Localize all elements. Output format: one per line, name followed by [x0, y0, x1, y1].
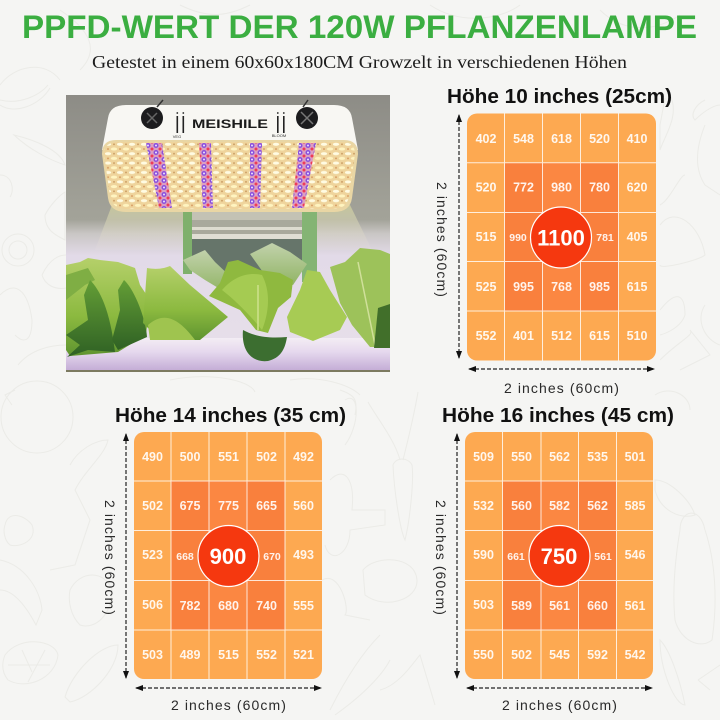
center value 900: [198, 526, 259, 586]
VEG mark: [173, 112, 184, 139]
PPFD grid: 16 inches: [465, 432, 653, 679]
PPFD grid: 10 inches: 525: [476, 280, 496, 294]
LED strips: [146, 143, 172, 208]
heading: 10 inches: Höhe 10 inches (25cm): [447, 86, 672, 108]
PPFD grid: 10 inches: 615: [589, 329, 610, 343]
PPFD grid: 16 inches: 502: [511, 648, 532, 662]
PPFD grid: 14 inches: 668: [176, 551, 194, 563]
VEG mark: VEG: [173, 134, 181, 139]
PPFD grid: 10 inches: 520: [476, 180, 496, 194]
PPFD grid: 14 inches: 515: [218, 648, 239, 662]
PPFD grid: 10 inches: 995: [513, 280, 534, 294]
PPFD grid: 14 inches: 506: [142, 598, 163, 612]
PPFD grid: 10 inches: 615: [627, 280, 647, 294]
PPFD grid: 10 inches: 515: [476, 230, 496, 244]
photo: grow lamp above lettuce: [66, 95, 390, 372]
PPFD grid: 16 inches: 561: [625, 599, 645, 613]
PPFD grid: 16 inches: 661: [507, 551, 525, 563]
PPFD grid: 10 inches: 548: [513, 132, 534, 146]
PPFD grid: 14 inches: 551: [218, 450, 239, 464]
PPFD grid: 10 inches: 980: [551, 180, 572, 194]
PPFD grid: 16 inches: 590: [473, 548, 494, 562]
PPFD grid: 16 inches: 501: [625, 450, 645, 464]
PPFD grid: 14 inches: 740: [256, 599, 277, 613]
PPFD grid: 10 inches: 510: [627, 329, 647, 343]
PPFD grid: 14 inches: 775: [218, 499, 239, 513]
knob right: [296, 100, 318, 129]
PPFD grid: 14 inches: 489: [180, 648, 200, 662]
PPFD grid: 14 inches: 500: [180, 450, 200, 464]
PPFD grid: 10 inches: 520: [589, 132, 610, 146]
PPFD grid: 14 inches: 782: [180, 599, 200, 613]
height axis: 14 inches: 2 inches (60cm): [102, 500, 118, 616]
PPFD grid: 16 inches: 532: [473, 499, 494, 513]
PPFD grid: 10 inches: 781: [596, 232, 614, 244]
center value 750: 750: [541, 544, 577, 569]
PPFD grid: 14 inches: 502: [256, 450, 277, 464]
PPFD grid: 14 inches: 490: [142, 450, 163, 464]
PPFD grid: 16 inches: 592: [587, 648, 608, 662]
PPFD grid: 16 inches: 562: [587, 499, 608, 513]
PPFD grid: 10 inches: 552: [476, 329, 496, 343]
PPFD grid: 16 inches: 560: [511, 499, 532, 513]
center value 1100: [530, 207, 592, 268]
knob left: [141, 100, 163, 129]
PPFD grid: 14 inches: 665: [256, 499, 277, 513]
PPFD grid: 14 inches: 555: [293, 599, 314, 613]
PPFD grid: 16 inches: 542: [625, 648, 645, 662]
PPFD grid: 16 inches: 509: [473, 450, 494, 464]
PPFD grid: 10 inches: 985: [589, 280, 610, 294]
BLOOM mark: BLOOM: [272, 133, 286, 138]
PPFD grid: 14 inches: 502: [142, 499, 163, 513]
PPFD grid: 10 inches: [467, 113, 656, 361]
PPFD grid: 10 inches: 405: [627, 230, 647, 244]
PPFD grid: 16 inches: 535: [587, 450, 608, 464]
PPFD grid: 10 inches: 768: [551, 280, 572, 294]
PPFD grid: 16 inches: 589: [511, 599, 532, 613]
PPFD grid: 14 inches: 552: [256, 648, 277, 662]
PPFD grid: 10 inches: 512: [551, 329, 572, 343]
PPFD grid: 16 inches: 562: [549, 450, 570, 464]
PPFD grid: 14 inches: 675: [180, 499, 200, 513]
PPFD grid: 16 inches: 546: [625, 548, 645, 562]
PPFD grid: 16 inches: 561: [594, 551, 612, 563]
PPFD grid: 14 inches: 492: [293, 450, 314, 464]
PPFD grid: 14 inches: 560: [293, 499, 314, 513]
green rack behind plants: [183, 212, 317, 282]
PPFD grid: 16 inches: 550: [511, 450, 532, 464]
height axis: 16 inches: 2 inches (60cm): [433, 500, 449, 616]
center value 750: [529, 526, 590, 586]
lamp logo: MEISHILE: [192, 117, 268, 131]
PPFD grid: 14 inches: 503: [142, 648, 163, 662]
PPFD grid: 16 inches: 503: [473, 598, 494, 612]
PPFD grid: 16 inches: 660: [587, 599, 608, 613]
PPFD grid: 10 inches: 402: [476, 132, 496, 146]
PPFD grid: 10 inches: 401: [513, 329, 534, 343]
PPFD grid: 14 inches: 523: [142, 548, 163, 562]
PPFD grid: 10 inches: 410: [627, 132, 647, 146]
PPFD grid: 16 inches: 585: [625, 499, 645, 513]
PPFD grid: 14 inches: 521: [293, 648, 314, 662]
PPFD grid: 10 inches: 780: [589, 180, 610, 194]
PPFD grid: 14 inches: 680: [218, 599, 239, 613]
PPFD grid: 14 inches: [134, 432, 322, 679]
floor tray: [66, 338, 390, 372]
PPFD grid: 10 inches: 620: [627, 180, 647, 194]
BLOOM mark: [272, 112, 286, 138]
width axis: 16 inches: 2 inches (60cm): [502, 697, 618, 713]
PPFD grid: 16 inches: 545: [549, 648, 570, 662]
width axis: 14 inches: 2 inches (60cm): [171, 697, 287, 713]
PPFD grid: 10 inches: 990: [509, 232, 527, 244]
title: PPFD-WERT DER 120W PFLANZENLAMPE: [22, 9, 697, 45]
PPFD grid: 16 inches: 561: [549, 599, 570, 613]
PPFD grid: 14 inches: 670: [263, 551, 281, 563]
center value 900: 900: [210, 544, 246, 569]
PPFD grid: 16 inches: 550: [473, 648, 494, 662]
heading: 14 inches: Höhe 14 inches (35 cm): [115, 405, 346, 427]
center value 1100: 1100: [537, 226, 585, 250]
height axis: 10 inches: 2 inches (60cm): [434, 182, 450, 298]
PPFD grid: 10 inches: 772: [513, 180, 534, 194]
lettuce: [66, 243, 390, 361]
PPFD grid: 10 inches: 618: [551, 132, 572, 146]
subtitle: Getestet in einem 60x60x180CM Growzelt in verschiedenen Höhen: [92, 52, 627, 72]
width axis: 10 inches: 2 inches (60cm): [504, 380, 620, 396]
PPFD grid: 14 inches: 493: [293, 548, 314, 562]
heading: 16 inches: Höhe 16 inches (45 cm): [442, 405, 674, 427]
lamp: [102, 100, 358, 212]
PPFD grid: 16 inches: 582: [549, 499, 570, 513]
